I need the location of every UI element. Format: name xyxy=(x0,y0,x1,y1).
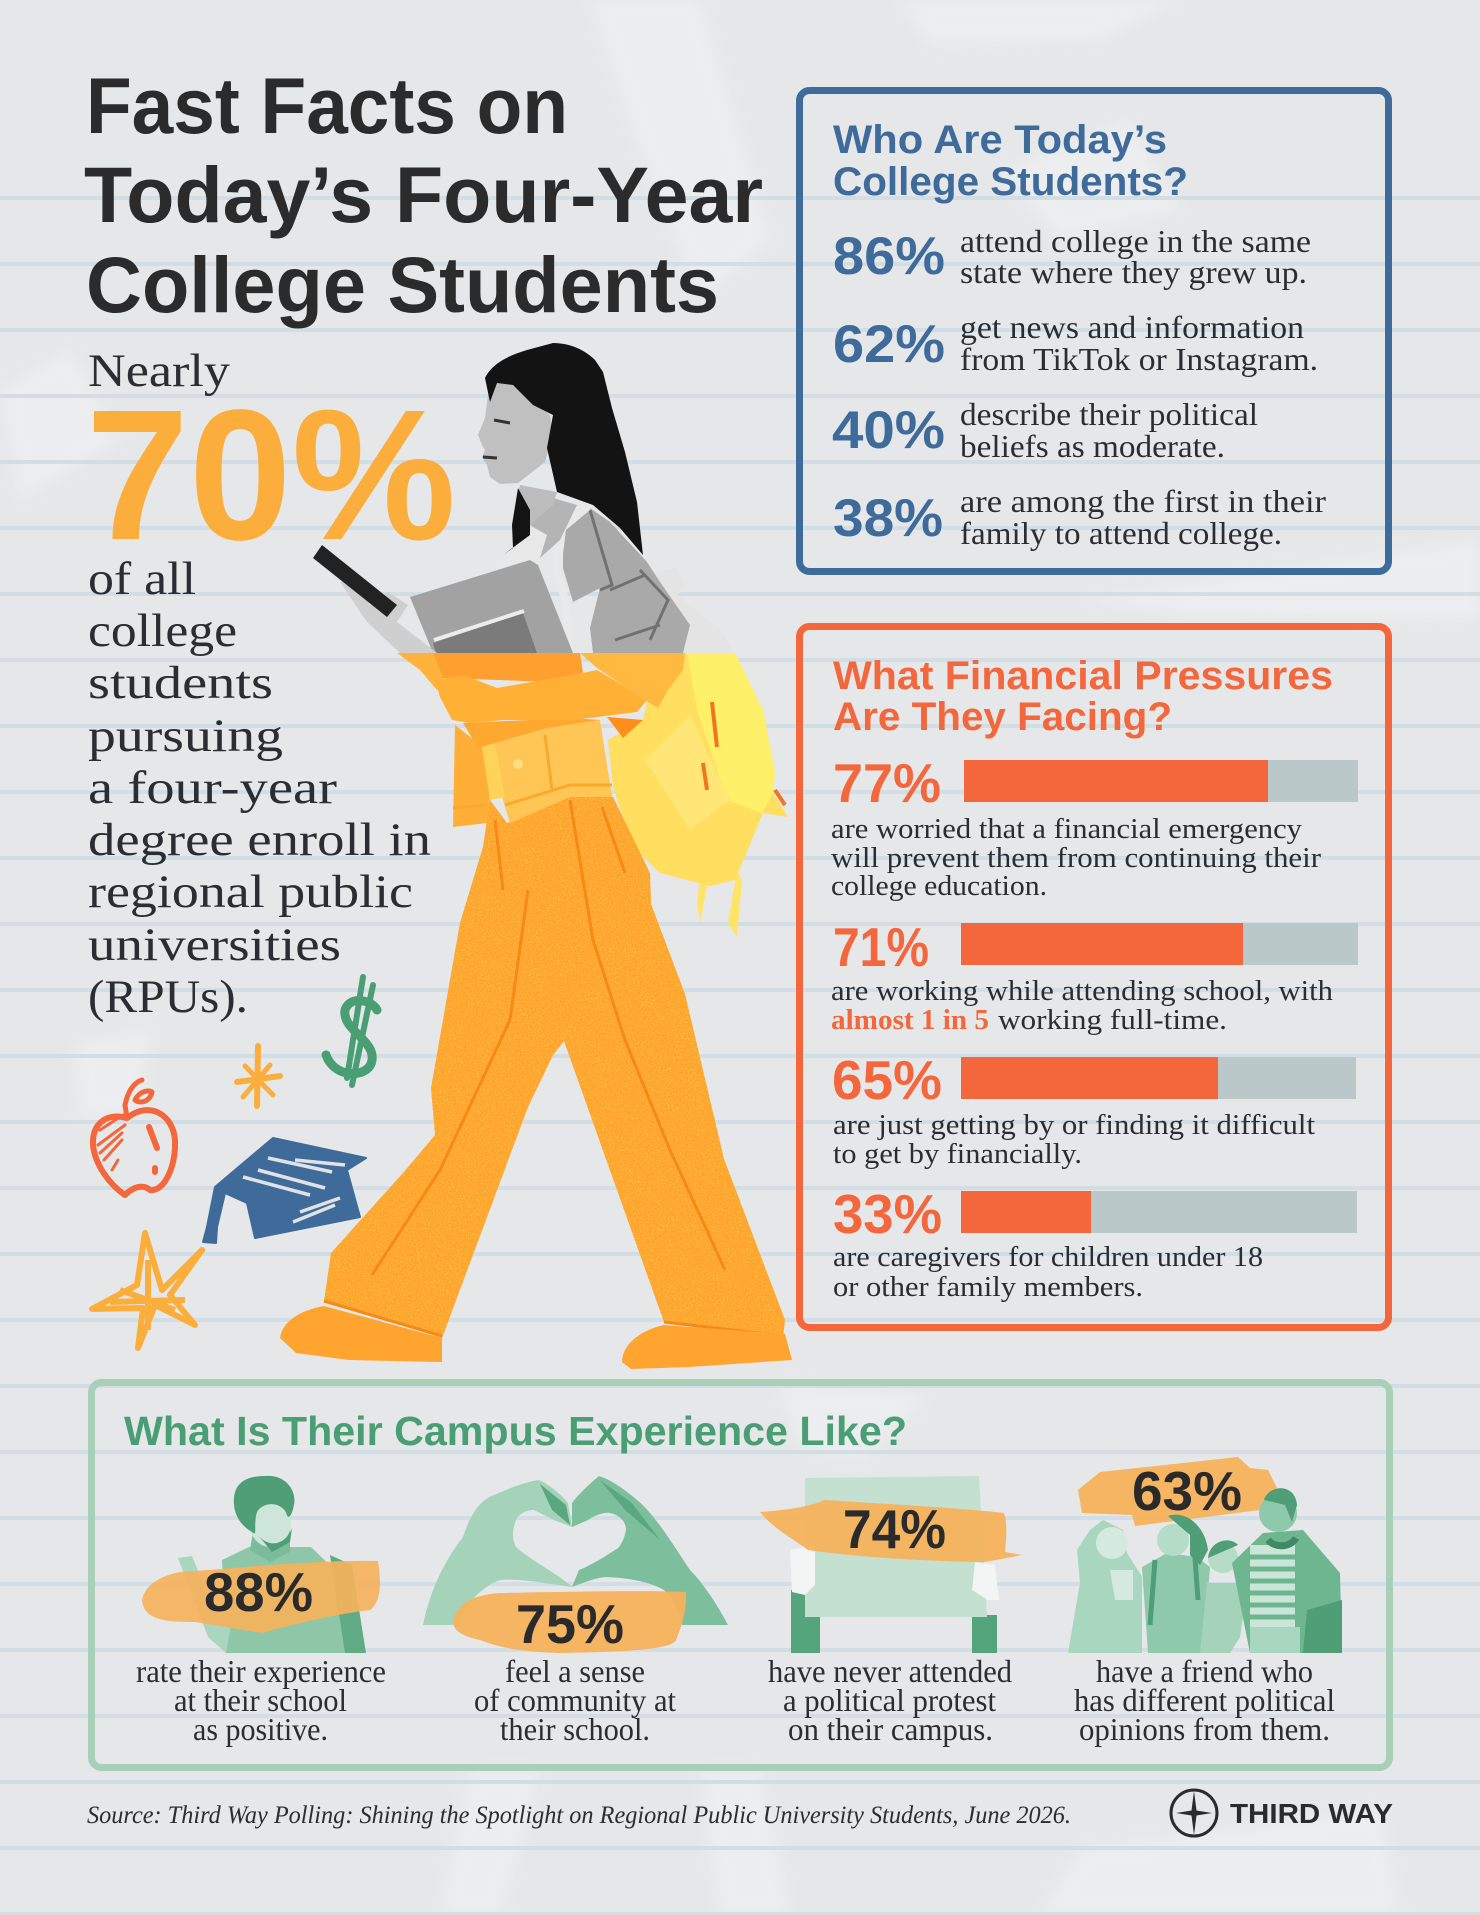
stat row: 71%: almost 1 in 5 xyxy=(831,1004,989,1036)
photo: hands holding blank sign xyxy=(790,1476,999,1653)
big number 70%: 70% xyxy=(86,372,456,579)
jacket lower xyxy=(495,720,612,823)
stat row: 77%: college education. xyxy=(831,870,1047,902)
stat: 62%: get news and information xyxy=(960,309,1304,345)
value: 63% xyxy=(1132,1460,1242,1522)
text block: RPU description: degree enroll in xyxy=(88,814,431,866)
heading: College Students? xyxy=(833,160,1188,204)
text block: RPU description: students xyxy=(88,657,273,709)
stat: 62% xyxy=(833,309,1318,377)
headline statistic: nearly 70%: Nearly xyxy=(88,345,231,397)
headline statistic: nearly 70% xyxy=(86,345,456,579)
description: have never attended xyxy=(768,1653,1012,1689)
backpack flap xyxy=(687,653,775,813)
backpack straps xyxy=(697,853,742,937)
icon: apple xyxy=(93,1080,175,1195)
description: rate their experience xyxy=(136,1653,386,1689)
photo: smiling student xyxy=(178,1476,366,1653)
doodles xyxy=(92,977,377,1348)
source note: Source: Third Way Polling: Shining the Spotlight on Regional Public University Students, June 2026. xyxy=(87,1802,1071,1829)
stat: 40% xyxy=(832,396,1258,464)
panel: campus experience xyxy=(92,1382,1390,1768)
stat: 86%: 86% xyxy=(833,227,945,286)
icon: star xyxy=(92,1233,202,1348)
title xyxy=(84,61,763,329)
icon: graduation cap xyxy=(203,1138,366,1243)
stat row: 77% xyxy=(831,752,1358,902)
heading: What Is Their Campus Experience Like? xyxy=(124,1408,907,1454)
hand holding phone xyxy=(340,580,437,653)
description: of community at xyxy=(474,1682,676,1718)
photo: heart hands xyxy=(423,1476,728,1625)
description xyxy=(1074,1653,1335,1747)
description xyxy=(474,1653,676,1747)
stat: 38%: family to attend college. xyxy=(960,515,1282,551)
logo: Third Way xyxy=(1171,1790,1393,1836)
stat row: 65%: 65% xyxy=(832,1049,942,1111)
value: 75% xyxy=(516,1593,624,1655)
title: Fast Facts on xyxy=(86,61,568,150)
description: on their campus. xyxy=(788,1711,993,1747)
pants xyxy=(324,797,785,1338)
stat row: 77%: will prevent them from continuing their xyxy=(831,842,1321,874)
title: Today’s Four-Year xyxy=(84,150,763,239)
logo: Third Way: THIRD WAY xyxy=(1230,1798,1393,1829)
stat row: 71%: working full-time. xyxy=(998,1004,1227,1036)
heading: Are They Facing? xyxy=(833,695,1172,739)
jacket upper xyxy=(563,508,690,653)
heading: Who Are Today’s xyxy=(833,118,1167,162)
item: 63% friend with different opinions xyxy=(1068,1457,1342,1747)
text block: RPU description: regional public xyxy=(88,866,413,918)
panel: who are today's college students xyxy=(800,90,1388,572)
stat row: 71% xyxy=(831,916,1358,1036)
description: have a friend who xyxy=(1096,1653,1313,1689)
brush swash xyxy=(760,1500,1022,1562)
back hair lock xyxy=(503,488,530,555)
icon: compass xyxy=(1171,1790,1217,1836)
description: as positive. xyxy=(193,1711,328,1747)
hair xyxy=(485,343,643,555)
backpack body xyxy=(608,653,788,886)
illustration: student walking xyxy=(280,343,792,1369)
stat: 86%: attend college in the same xyxy=(960,223,1311,259)
stat row: 65% xyxy=(832,1049,1356,1170)
description: has different political xyxy=(1074,1682,1335,1718)
stat row: 33%: 33% xyxy=(833,1183,942,1245)
stat: 38%: 38% xyxy=(833,489,943,548)
stat: 38%: are among the first in their xyxy=(960,483,1326,519)
backpack upper xyxy=(653,567,733,653)
stat: 62%: from TikTok or Instagram. xyxy=(960,341,1318,377)
sleeve xyxy=(580,653,685,708)
stat row: 33%: are caregivers for children under 18 xyxy=(833,1241,1263,1273)
panel: financial pressures xyxy=(800,626,1388,1328)
text block: RPU description: pursuing xyxy=(88,710,283,762)
title: College Students xyxy=(86,240,719,329)
stat row: 33%: or other family members. xyxy=(833,1271,1143,1303)
stat: 62%: 62% xyxy=(833,315,945,374)
face xyxy=(478,375,553,484)
brush swash xyxy=(453,1591,686,1653)
stat row: 71%: are working while attending school, with xyxy=(831,975,1334,1007)
description: feel a sense xyxy=(505,1653,645,1689)
phone xyxy=(313,545,397,617)
book lower xyxy=(433,653,583,682)
forearm stub xyxy=(397,653,443,690)
stat row: 65%: to get by financially. xyxy=(833,1138,1082,1170)
stat: 86% xyxy=(833,223,1311,290)
brush swash xyxy=(142,1561,380,1633)
value: 74% xyxy=(843,1498,946,1560)
shirt and collar xyxy=(500,525,548,565)
shoes xyxy=(280,1306,442,1362)
text block: RPU description: universities xyxy=(88,919,341,971)
text block: RPU description xyxy=(88,553,431,1023)
stat: 40%: describe their political xyxy=(960,396,1258,432)
text block: RPU description: (RPUs). xyxy=(88,971,248,1023)
shadow under arm xyxy=(463,718,600,748)
heading xyxy=(833,654,1333,739)
stat: 40%: beliefs as moderate. xyxy=(960,428,1225,464)
icon: dollar sign xyxy=(326,977,377,1085)
arm and hand xyxy=(435,670,647,723)
item: 75% sense of community xyxy=(423,1476,728,1747)
item: 88% positive experience xyxy=(136,1476,386,1747)
stat: 86%: state where they grew up. xyxy=(960,254,1307,290)
book upper xyxy=(410,560,573,653)
stat row: 77%: 77% xyxy=(833,752,941,814)
description xyxy=(768,1653,1012,1747)
heading: What Financial Pressures xyxy=(833,654,1333,698)
text block: RPU description: a four-year xyxy=(88,762,337,814)
value: 88% xyxy=(204,1561,313,1623)
text block: RPU description: college xyxy=(88,605,237,657)
stat row: 65%: are just getting by or finding it difficult xyxy=(833,1109,1315,1141)
brush swash xyxy=(1078,1457,1278,1526)
text block: RPU description: of all xyxy=(88,553,196,605)
stat row: 77%: are worried that a financial emergency xyxy=(831,813,1303,845)
item: 74% no protest xyxy=(760,1476,1022,1747)
description xyxy=(136,1653,386,1747)
stat: 38% xyxy=(833,483,1326,551)
icon: sparkle xyxy=(237,1046,280,1106)
stat row: 71%: 71% xyxy=(833,916,929,978)
description: at their school xyxy=(174,1682,347,1718)
stat row: 33% xyxy=(833,1183,1357,1303)
description: their school. xyxy=(500,1711,650,1747)
shoulder strap xyxy=(553,503,593,652)
description: opinions from them. xyxy=(1079,1711,1330,1747)
description: a political protest xyxy=(783,1682,996,1718)
stat: 40%: 40% xyxy=(832,401,945,460)
photo: group of students xyxy=(1068,1488,1342,1653)
heading xyxy=(833,118,1188,204)
